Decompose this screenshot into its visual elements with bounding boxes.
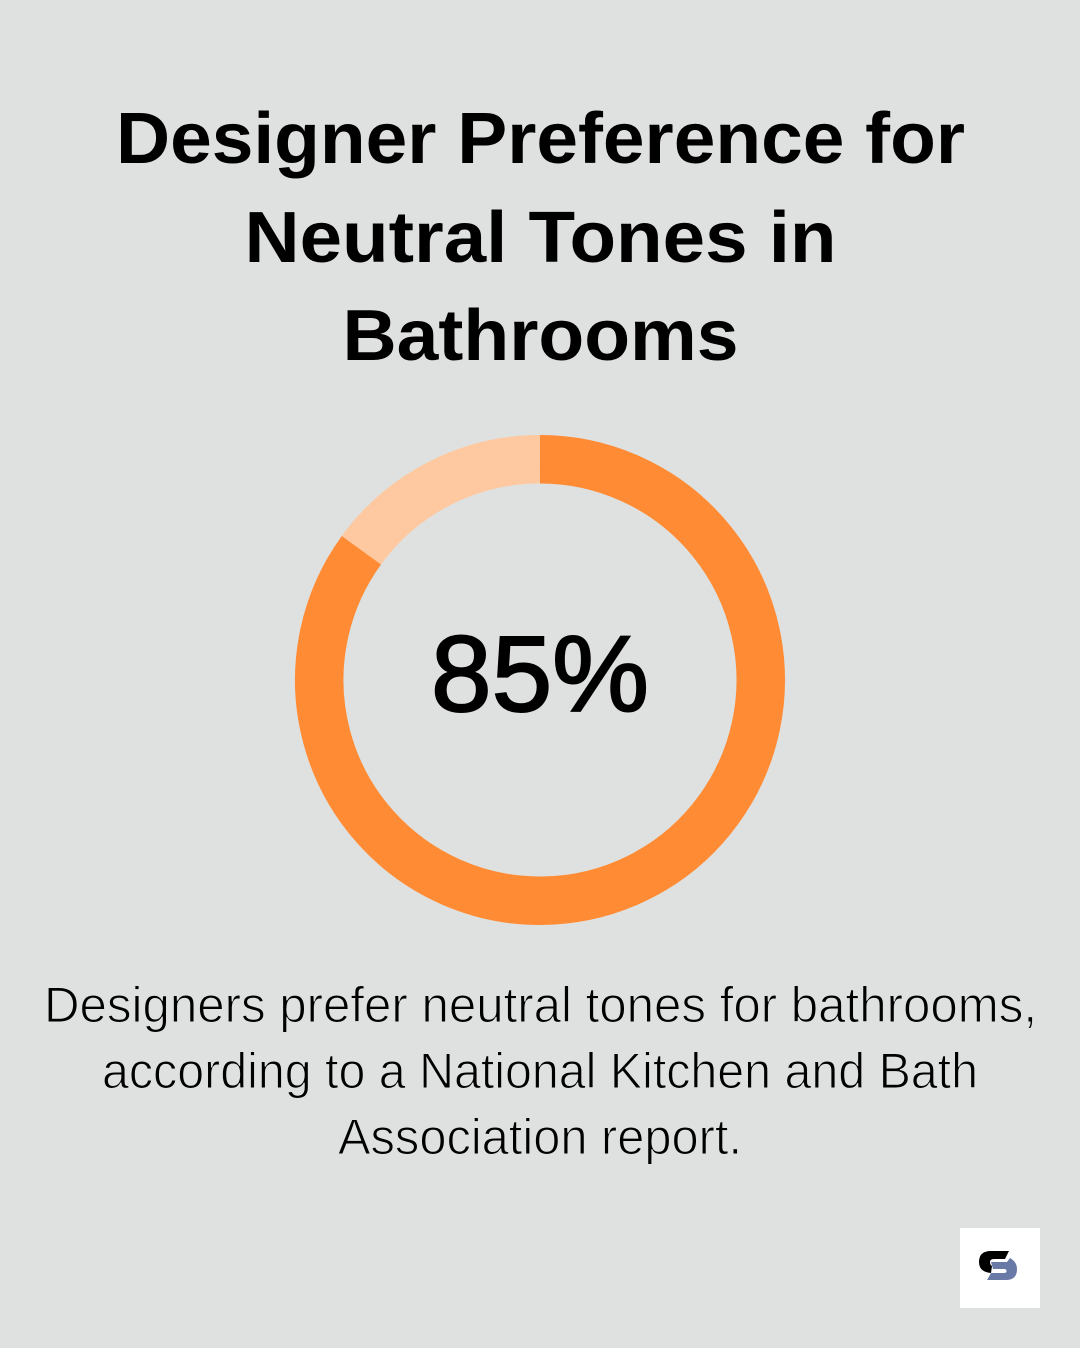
description text: Designers prefer neutral tones for bathrooms, — [44, 977, 1037, 1033]
85% segment — [319, 459, 761, 901]
title: Designer Preference for — [116, 99, 965, 179]
remaining 15% segment — [361, 459, 540, 550]
title — [116, 99, 965, 376]
title: Neutral Tones in — [244, 198, 836, 278]
percentage value: 85% — [431, 613, 649, 734]
title: Bathrooms — [342, 296, 738, 376]
logo badge — [960, 1228, 1040, 1308]
description text: Association report. — [338, 1109, 742, 1165]
logo mark — [979, 1251, 1017, 1280]
donut chart: 85% — [319, 459, 761, 901]
description text — [44, 977, 1037, 1165]
description text: according to a National Kitchen and Bath — [102, 1043, 978, 1099]
